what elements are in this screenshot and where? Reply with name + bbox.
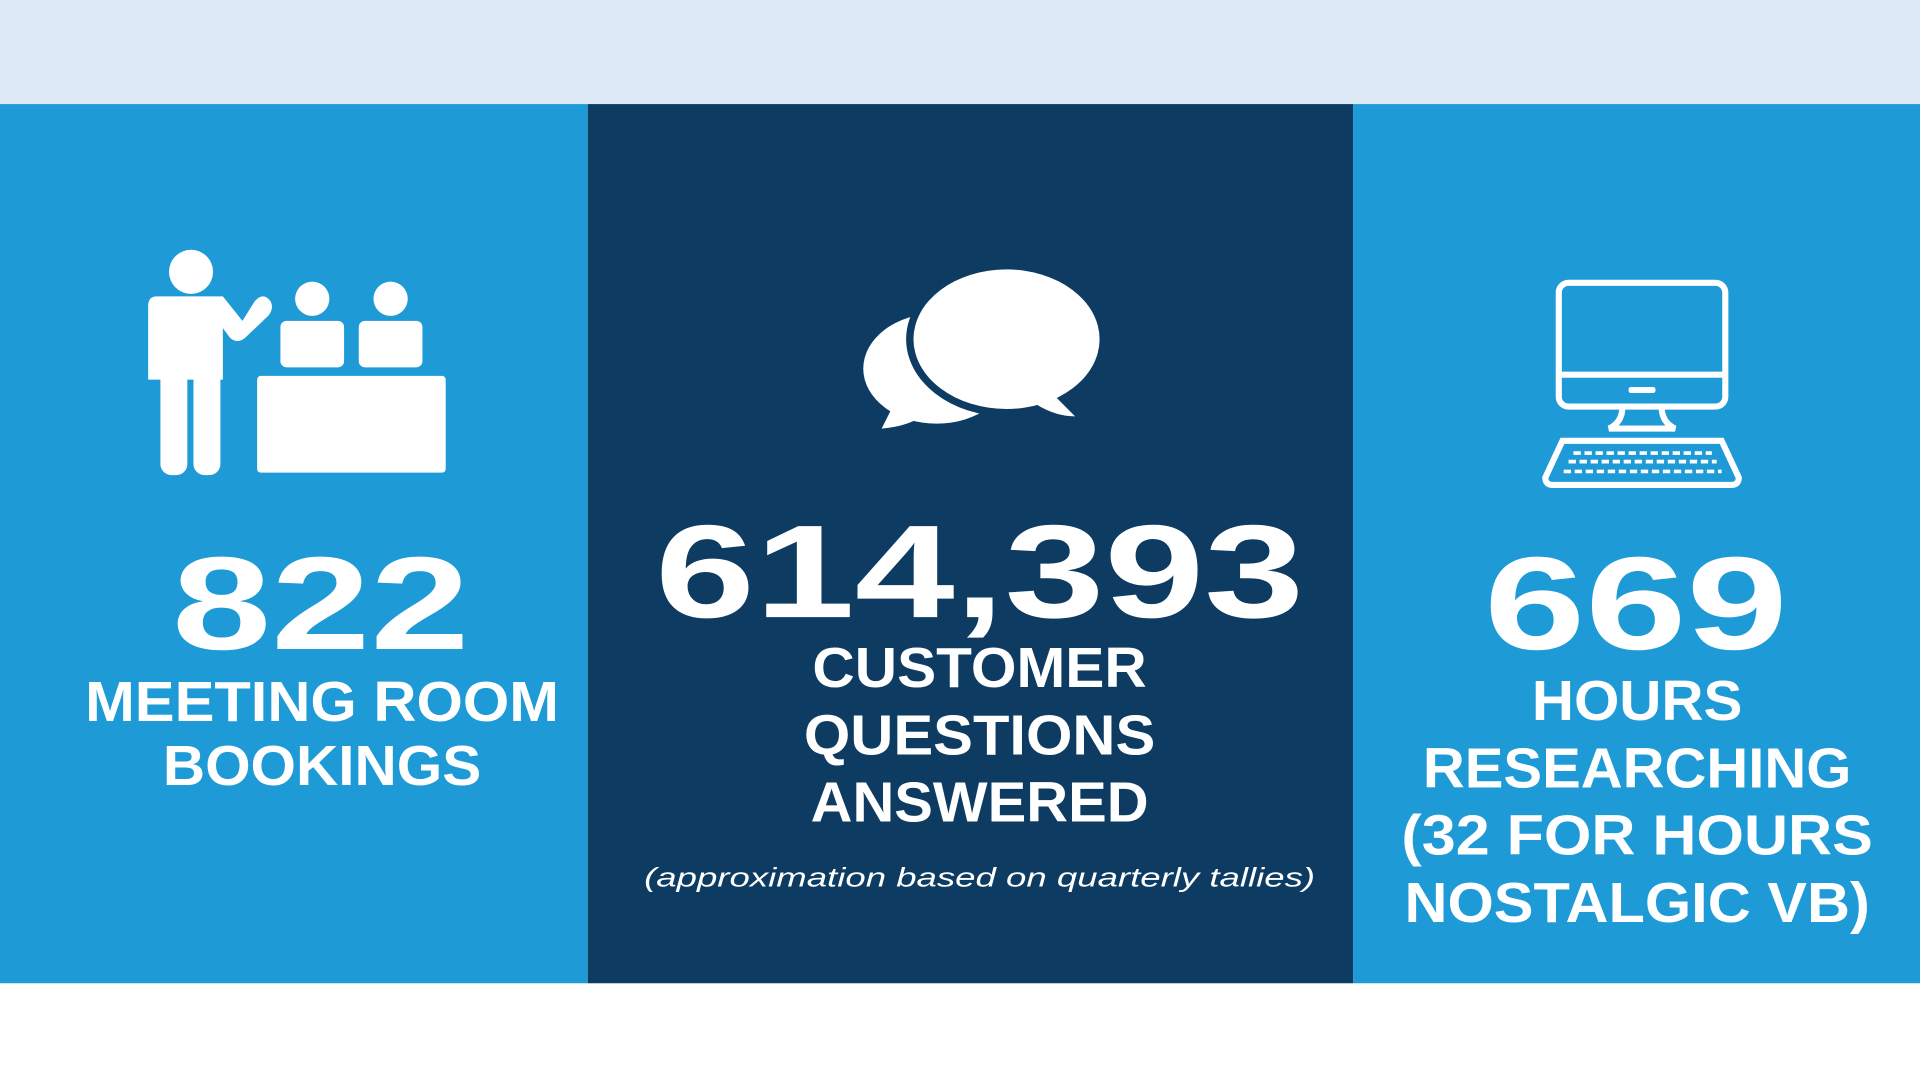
stat: 614,393: 614,393	[655, 498, 1304, 646]
stat: 822: 822	[172, 530, 470, 678]
icon: presenter with audience	[148, 250, 446, 475]
stat: 669: 669	[1484, 530, 1788, 678]
icon: speech bubbles	[863, 262, 1107, 429]
label: customer questions answered	[804, 636, 1155, 834]
label: meeting room bookings: MEETING ROOM	[85, 670, 559, 733]
label: hours researching: NOSTALGIC VB)	[1404, 871, 1870, 934]
label: customer questions answered: CUSTOMER	[812, 636, 1147, 699]
panel: meeting rooms	[0, 104, 588, 983]
top band	[0, 0, 1920, 104]
icon: computer	[1545, 283, 1739, 485]
label: customer questions answered: ANSWERED	[811, 771, 1149, 834]
label: meeting room bookings	[85, 670, 559, 797]
label: hours researching: HOURS	[1532, 669, 1742, 732]
label: meeting room bookings: BOOKINGS	[163, 734, 481, 797]
label: hours researching: RESEARCHING	[1423, 736, 1851, 799]
label: hours researching: (32 FOR HOURS	[1401, 804, 1873, 867]
panel: customer questions	[588, 104, 1353, 983]
label: customer questions answered: QUESTIONS	[804, 703, 1155, 766]
note: approximation: (approximation based on quarterly tallies)	[644, 863, 1315, 893]
panel: research hours	[1353, 104, 1920, 983]
label: hours researching	[1401, 669, 1873, 934]
